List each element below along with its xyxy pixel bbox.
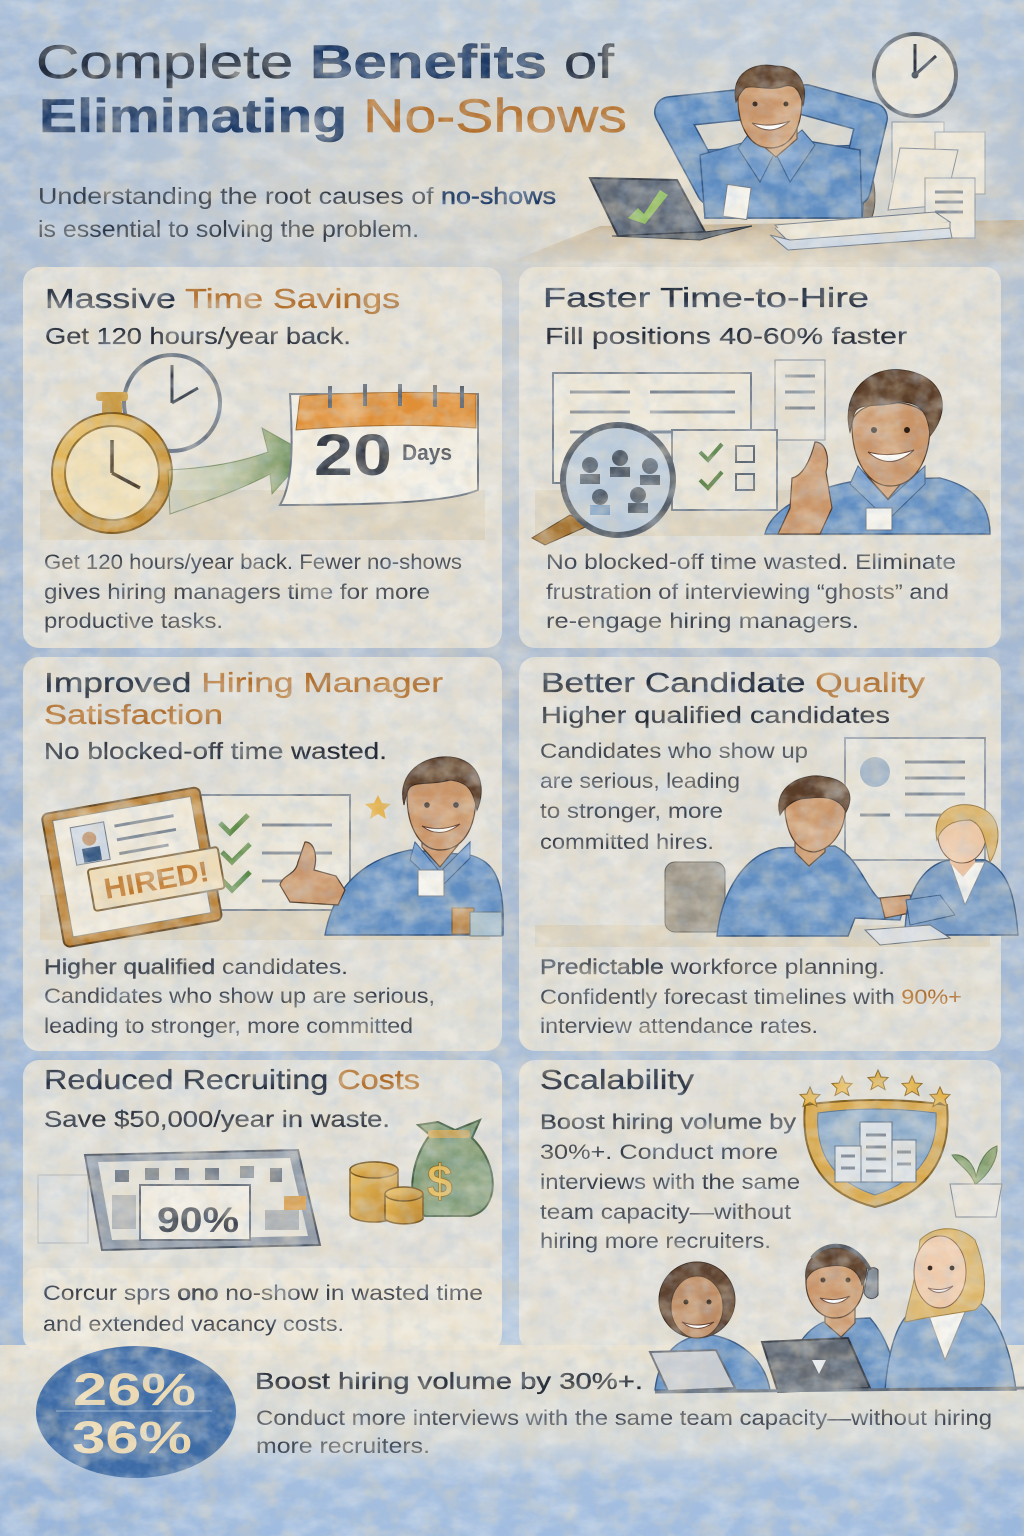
heading: faster time-to-hire: Faster Time-to-Hire: [543, 282, 869, 313]
heading: improved hiring manager satisfaction: Improved Hiring Manager: [44, 667, 443, 698]
sub-panel and text: wasted time: [23, 1268, 502, 1350]
text: time-to-hire body: frustration of interviewing “ghosts” and: [546, 581, 949, 604]
illustration: clocks, arrow and calendar: 20: [314, 423, 392, 488]
panel: massive time savings: [23, 267, 502, 648]
illustration: handshake interview: [535, 738, 1018, 947]
text: scalability body: team capacity—without: [540, 1201, 791, 1224]
title: Eliminating No-Shows: [39, 89, 627, 142]
subheading: no blocked-off time: No blocked-off time wasted.: [44, 738, 387, 764]
text: hiring manager body: leading to stronger, more committed: [44, 1015, 413, 1038]
title: [36, 35, 627, 142]
panel: scalability: [519, 1060, 1002, 1350]
badge: 26% and 36%: 36%: [72, 1412, 192, 1463]
illustration: relaxed man at desk with clock: [510, 34, 1024, 262]
sub-panel and text: wasted time: Corcur sprs ono no-show in wasted time: [43, 1282, 483, 1305]
heading: improved hiring manager satisfaction: [44, 667, 443, 730]
panel: better candidate quality: [519, 657, 1018, 1051]
callout: boost hiring volume: Boost hiring volume by 30%+.: [255, 1368, 643, 1394]
text: scalability body: interviews with the same: [540, 1171, 800, 1194]
illustration: clocks, arrow and calendar: Days: [402, 440, 452, 465]
illustration: tablet, coins and money bag: [38, 1120, 493, 1250]
subheading: save 50000: Save $50,000/year in waste.: [44, 1106, 390, 1132]
subtitle: Understanding the root causes of no-shows: [38, 183, 556, 209]
text: candidates who show up: [540, 740, 808, 854]
text: scalability body: 30%+. Conduct more: [540, 1141, 778, 1164]
panel: faster time-to-hire: [519, 267, 1001, 648]
text: time savings body: gives hiring managers time for more: [44, 581, 430, 604]
heading: better candidate quality: Better Candidate Quality: [541, 667, 925, 698]
icon: shield with city and stars: [800, 1070, 950, 1207]
illustration: clipboard, hired stamp and manager: [40, 757, 503, 948]
subtitle: is essential to solving the problem.: [38, 216, 419, 242]
text: candidates who show up: Candidates who show up: [540, 740, 808, 763]
heading: improved hiring manager satisfaction: Satisfaction: [44, 699, 223, 730]
heading: scalability: Scalability: [540, 1064, 694, 1095]
text: workforce planning body: [540, 956, 962, 1038]
callout: boost hiring volume: [255, 1368, 992, 1458]
text: scalability body: hiring more recruiters.: [540, 1230, 771, 1253]
text: time savings body: [44, 551, 462, 633]
text: workforce planning body: Confidently forecast timelines with 90%+: [540, 986, 962, 1009]
illustration: clipboard, hired stamp and manager: HIRED!: [102, 856, 211, 906]
title: Complete Benefits of: [36, 35, 615, 88]
callout: boost hiring volume: Conduct more interviews with the same team capacity—without hiring: [256, 1407, 992, 1430]
text: time-to-hire body: re-engage hiring managers.: [546, 610, 859, 633]
subheading: 120 hours: Get 120 hours/year back.: [45, 323, 351, 349]
text: hiring manager body: Higher qualified candidates.: [44, 956, 348, 979]
text: workforce planning body: interview attendance rates.: [540, 1015, 818, 1038]
subtitle: [38, 183, 556, 242]
subheading: higher qualified candidates: Higher qualified candidates: [541, 702, 890, 728]
sub-panel and text: wasted time: and extended vacancy costs.: [43, 1313, 344, 1336]
text: hiring manager body: [44, 956, 435, 1038]
text: candidates who show up: to stronger, more: [540, 800, 723, 823]
badge: 26% and 36%: 26%: [73, 1364, 196, 1415]
bottom band: [0, 1345, 1024, 1480]
text: workforce planning body: Predictable workforce planning.: [540, 956, 885, 979]
text: candidates who show up: committed hires.: [540, 831, 714, 854]
text: time-to-hire body: No blocked-off time wasted. Eliminate: [546, 551, 956, 574]
text: scalability body: [540, 1111, 800, 1253]
text: time savings body: productive tasks.: [44, 610, 223, 633]
heading: massive time savings: Massive Time Savings: [45, 283, 400, 314]
text: hiring manager body: Candidates who show up are serious,: [44, 985, 435, 1008]
icon: wall clock: [874, 34, 956, 116]
badge: 26% and 36%: [36, 1346, 236, 1478]
text: candidates who show up: are serious, leading: [540, 770, 740, 793]
illustration: resume search and thumbs-up manager: [532, 360, 990, 545]
heading: reduced recruiting costs: Reduced Recruiting Costs: [44, 1064, 420, 1095]
illustration: three team members with laptops: [650, 1229, 1024, 1392]
text: scalability body: Boost hiring volume by: [540, 1111, 797, 1134]
panel: reduced recruiting costs: [23, 1060, 502, 1350]
illustration: clocks, arrow and calendar: [40, 355, 485, 540]
illustration: tablet, coins and money bag: $: [427, 1155, 453, 1207]
subheading: fill positions: Fill positions 40-60% faster: [545, 323, 907, 349]
text: time savings body: Get 120 hours/year back. Fewer no-shows: [44, 551, 462, 574]
text: time-to-hire body: [546, 551, 956, 633]
icon: potted plant: [950, 1146, 1002, 1217]
illustration: tablet, coins and money bag: 90%: [157, 1201, 239, 1240]
panel: hiring manager satisfaction: [23, 657, 503, 1051]
callout: boost hiring volume: more recruiters.: [256, 1435, 430, 1458]
